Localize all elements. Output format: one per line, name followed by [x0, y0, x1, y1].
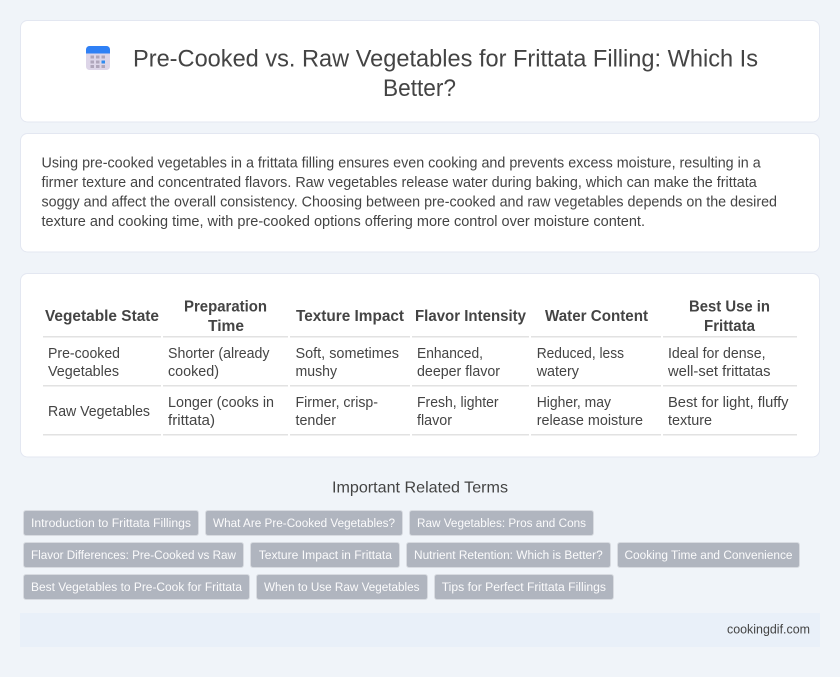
table row: raw vegetables: Best for light, fluffy [668, 395, 789, 411]
table row: raw vegetables: tender [296, 413, 336, 429]
title [133, 46, 758, 102]
footer: cookingdif.com [727, 622, 810, 636]
heading: important related terms: Important Related Terms [332, 480, 508, 496]
table row: raw vegetables: Firmer, crisp- [296, 395, 378, 411]
table row: pre-cooked vegetables: mushy [296, 364, 338, 380]
table row: raw vegetables: Longer (cooks in [168, 395, 274, 411]
table row: pre-cooked vegetables: watery [536, 364, 580, 380]
table header row: Best Use in [689, 299, 770, 316]
panel: comparison table [20, 274, 820, 457]
table row: raw vegetables: Fresh, lighter [417, 395, 499, 411]
table row: pre-cooked vegetables: deeper flavor [417, 364, 500, 380]
text block: summary: firmer texture and concentrated flavors. Raw vegetables release water during baking, which can make the frittata [42, 175, 757, 191]
table row: raw vegetables: frittata) [168, 413, 215, 429]
text block: summary [42, 156, 777, 230]
table row: pre-cooked vegetables: Reduced, less [537, 346, 624, 362]
text block: summary: soggy and affect the overall consistency. Choosing between pre-cooked and raw vegetables depends on the desired [42, 195, 777, 211]
table header row: Flavor Intensity [415, 308, 526, 325]
table row: raw vegetables: release moisture [537, 413, 643, 429]
table row: raw vegetables [43, 395, 797, 436]
table row: pre-cooked vegetables: Soft, sometimes [296, 346, 399, 362]
tag list: related terms: When to Use Raw Vegetables [264, 580, 420, 594]
footer [20, 613, 820, 647]
title: Better? [383, 75, 456, 102]
tag list: related terms: Texture Impact in Frittata [259, 548, 392, 562]
table row: pre-cooked vegetables: Vegetables [48, 364, 119, 380]
table header row: Texture Impact [296, 308, 405, 325]
title: Pre-Cooked vs. Raw Vegetables for Frittata Filling: Which Is [133, 46, 758, 72]
text block: summary: texture and cooking time, with pre-cooked options offering more control over moisture content. [42, 214, 645, 230]
tag list: related terms: Cooking Time and Convenience [624, 548, 793, 562]
table header row [43, 299, 797, 338]
table header row: Time [208, 318, 244, 335]
text block: summary: Using pre-cooked vegetables in a frittata filling ensures even cooking and prevents excess moisture, resulting in a [42, 156, 762, 172]
table row: pre-cooked vegetables [43, 346, 797, 386]
tag list: related terms: Flavor Differences: Pre-Cooked vs Raw [31, 548, 236, 562]
icon: calendar [86, 46, 110, 70]
table row: pre-cooked vegetables: Enhanced, [417, 346, 483, 362]
table row: pre-cooked vegetables: Shorter (already [168, 346, 270, 362]
table header row: Vegetable State [45, 308, 159, 325]
tag list: related terms: Raw Vegetables: Pros and Cons [417, 516, 586, 530]
tag list: related terms: Introduction to Frittata Fillings [31, 516, 191, 530]
table row: raw vegetables: Raw Vegetables [48, 404, 150, 420]
tag list: related terms: Best Vegetables to Pre-Cook for Frittata [31, 580, 242, 594]
tag list: related terms: Tips for Perfect Frittata Fillings [442, 580, 606, 594]
table row: pre-cooked vegetables: well-set frittatas [667, 364, 770, 380]
panel: summary paragraph [20, 134, 820, 252]
tag list: related terms: What Are Pre-Cooked Vegetables? [213, 516, 395, 530]
table row: pre-cooked vegetables: Ideal for dense, [668, 346, 766, 362]
table header row: Preparation [184, 299, 267, 316]
tag list: related terms: Nutrient Retention: Which is Better? [414, 548, 603, 562]
table row: pre-cooked vegetables: Pre-cooked [48, 346, 120, 362]
table header row: Water Content [545, 308, 649, 325]
table row: raw vegetables: texture [668, 413, 712, 429]
table row: raw vegetables: flavor [417, 413, 452, 429]
table row: raw vegetables: Higher, may [537, 395, 612, 411]
table row: pre-cooked vegetables: cooked) [168, 364, 219, 380]
table header row: Frittata [704, 318, 755, 335]
panel: header [20, 20, 820, 122]
tag list: related terms [24, 510, 800, 600]
